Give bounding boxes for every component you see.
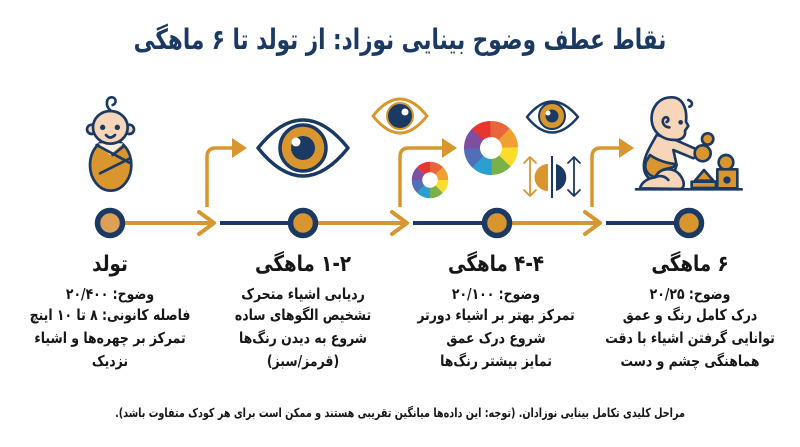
text block: 6 months: درک کامل رنگ و عمق [623,306,757,324]
arrow: birth to month 1-2 (upper) [207,138,247,207]
text block: 4 months: ۴-۴ ماهگی [448,250,544,276]
text block: birth: نزدیک [92,353,128,370]
icon: sitting baby with toys [636,97,742,189]
text block: birth: وضوح: ۲۰/۴۰۰ [66,286,154,303]
text block: 1-2 months [235,250,371,370]
icon: small colour wheel [412,162,448,198]
timeline node: 6 months [676,210,702,236]
timeline arrow 2 [318,212,407,234]
text block: 1-2 months: ۱-۲ ماهگی [255,250,352,276]
text block: birth: فاصله کانونی: ۸ تا ۱۰ اینچ [30,307,190,324]
arrow: month 1-2 to month 4 (upper) [400,138,457,207]
text block: 1-2 months: شروع به دیدن رنگ‌ها [239,329,367,347]
timeline node: 1-2 months [290,210,316,236]
text block: 4 months: شروع درک عمق [446,330,546,347]
text block: 6 months: هماهنگی چشم و دست [621,352,759,370]
text block: 1-2 months: تشخیص الگوهای ساده [235,306,371,324]
icon: navy eye [527,102,578,132]
text block: 6 months: توانایی گرفتن اشیاء با دقت [605,329,775,347]
text block: 1-2 months: ردیابی اشیاء متحرک [241,286,365,303]
timeline arrow 3 [511,212,600,234]
text block: 1-2 months: (قرمز/سبز) [267,353,339,370]
title: نقاط عطف وضوح بینایی نوزاد: از تولد تا ۶ ماهگی [134,23,666,57]
icon: large colour wheel [464,121,518,175]
text block: birth: تولد [92,250,128,276]
timeline node: 4 months [484,210,510,236]
timeline node: birth [98,210,122,236]
navy connector lines [220,221,676,225]
text block: birth: تمرکز بر چهره‌ها و اشیاء [34,330,186,347]
icon: swaddled newborn [87,97,134,191]
text block: birth [30,250,190,370]
text block: 6 months: ۶ ماهگی [651,250,729,276]
arrow: month 4 to month 6 (upper) [592,138,634,207]
text block: 4 months [416,250,575,370]
icon: depth perception [524,156,580,198]
text block: 6 months [605,250,775,370]
text block: 4 months: تمایز بیشتر رنگ‌ها [440,352,552,370]
text block: 4 months: تمرکز بهتر بر اشیاء دورتر [416,307,575,324]
text block: 6 months: وضوح: ۲۰/۲۵ [650,286,730,303]
footnote: مراحل کلیدی تکامل بینایی نوزادان. (توجه: این داده‌ها میانگین تقریبی هستند و ممکن است برای هر کودک متفاوت باشد). [115,405,685,420]
icon: orange outline eye [373,99,427,133]
icon: large eye [258,120,348,176]
timeline arrow 1 [125,212,214,234]
text block: 4 months: وضوح: ۲۰/۱۰۰ [452,286,540,303]
